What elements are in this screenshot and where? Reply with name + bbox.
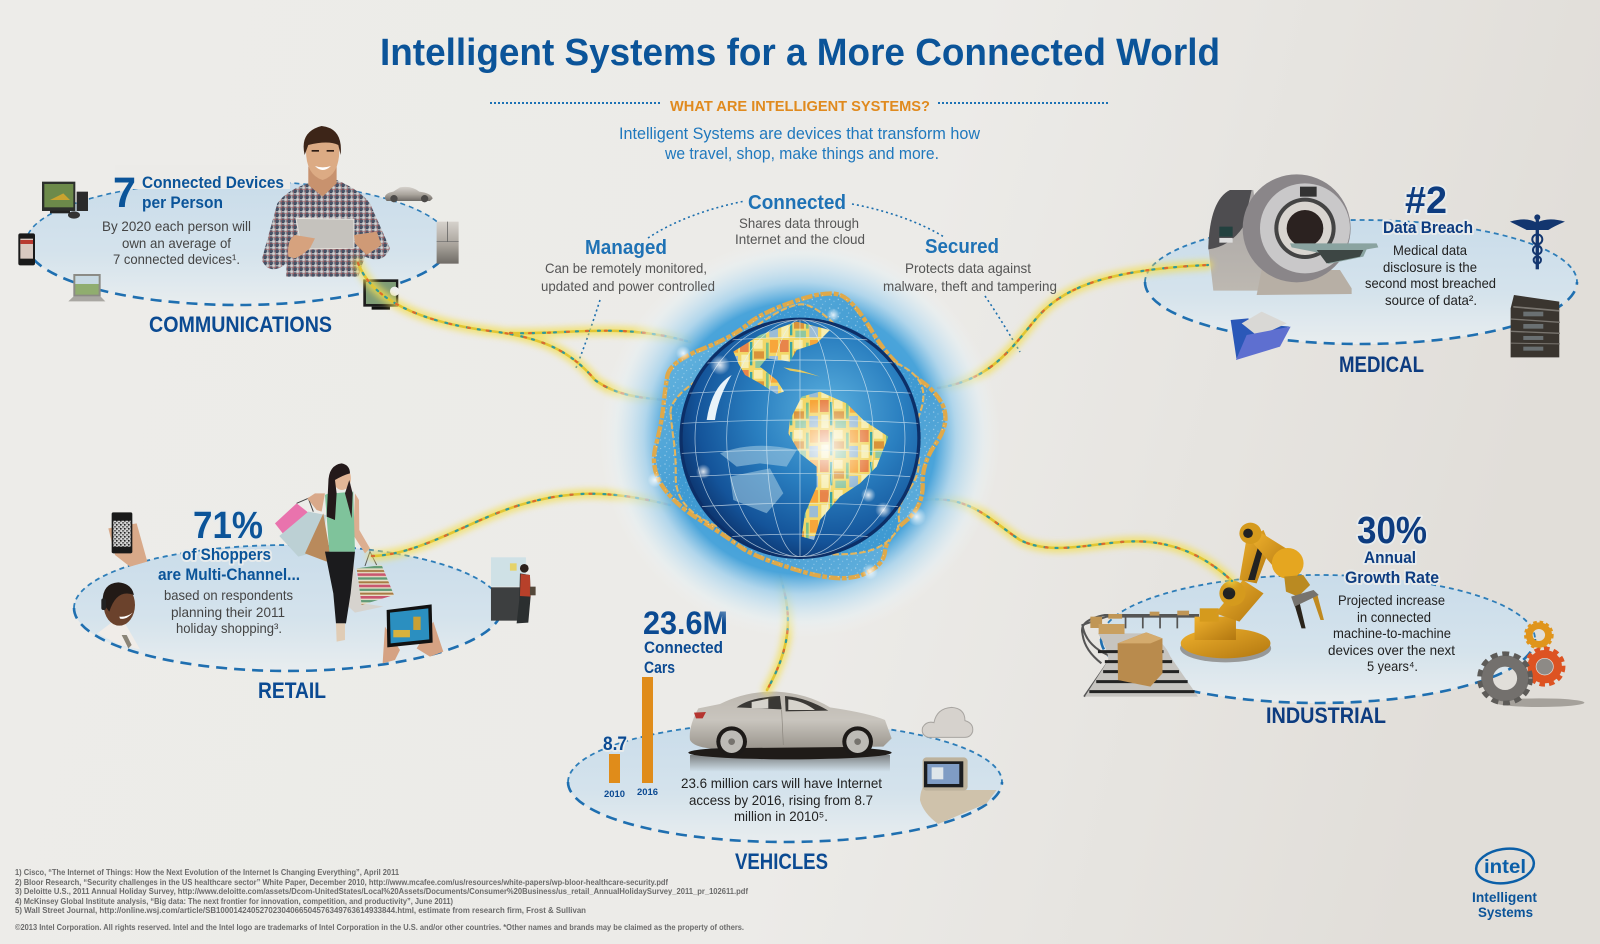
description bbox=[1328, 592, 1455, 674]
icon: man with tablet bbox=[262, 126, 390, 277]
description: planning their 2011 bbox=[171, 604, 285, 620]
north america bbox=[733, 322, 830, 394]
description: 7 connected devices¹. bbox=[113, 251, 240, 267]
globe bbox=[600, 238, 1000, 638]
description: in connected bbox=[1357, 609, 1431, 625]
sphere bbox=[648, 308, 926, 580]
orbiting ribbons bbox=[641, 280, 957, 592]
footnotes: 4) McKinsey Global Institute analysis, “Big data: The next frontier for innovation, competition, and productivity”, June 2011) bbox=[15, 896, 453, 906]
footnotes: 2) Bloor Research, “Security challenges in the US healthcare sector” White Paper, December 2010, http://www.mcafee.com/us/resources/white-papers/wp-bloor-healthcare-security.pdf bbox=[15, 877, 668, 887]
attribute: managed: updated and power controlled bbox=[541, 278, 715, 294]
stat bbox=[643, 605, 728, 677]
attribute: connected: Internet and the cloud bbox=[735, 231, 865, 247]
panel: industrial bbox=[1082, 510, 1584, 728]
icon: phone in hand bbox=[108, 512, 147, 567]
stat: Growth Rate bbox=[1345, 568, 1439, 587]
icon: conveyor belt with boxes bbox=[1082, 611, 1198, 697]
grid lines bbox=[682, 320, 918, 557]
description bbox=[164, 587, 293, 636]
description: source of data². bbox=[1385, 292, 1477, 308]
logo: intel intelligent systems: Intelligent bbox=[1472, 889, 1537, 905]
bar chart bbox=[603, 677, 658, 799]
icon: blue folder bbox=[1231, 312, 1291, 360]
description: access by 2016, rising from 8.7 bbox=[689, 792, 873, 808]
bar chart: 8.7 bbox=[603, 734, 627, 755]
description: Medical data bbox=[1393, 242, 1467, 258]
south america bbox=[788, 392, 888, 540]
attribute: connected: Connected bbox=[748, 192, 846, 214]
orbit ellipse bbox=[1101, 575, 1535, 703]
description: devices over the next bbox=[1328, 642, 1455, 658]
bar chart: 2016 bbox=[637, 787, 658, 797]
intro text: Intelligent Systems are devices that transform how bbox=[619, 124, 981, 143]
description: million in 2010⁵. bbox=[734, 808, 828, 824]
logo: intel intelligent systems: intel bbox=[1484, 857, 1526, 878]
logo: intel intelligent systems bbox=[1472, 845, 1537, 920]
attribute: secured: Secured bbox=[925, 236, 999, 258]
stat: 71% bbox=[193, 505, 263, 547]
stat: Cars bbox=[644, 658, 675, 677]
icon: caduceus bbox=[1510, 214, 1565, 269]
description: 23.6 million cars will have Internet bbox=[681, 775, 882, 791]
description: based on respondents bbox=[164, 587, 293, 603]
icon: server rack bbox=[1511, 295, 1560, 357]
data streams connecting globe to sectors bbox=[358, 263, 1232, 690]
stat: Annual bbox=[1364, 548, 1416, 567]
icon: MRI scanner bbox=[1208, 174, 1378, 295]
description bbox=[102, 218, 251, 267]
orbit ellipse bbox=[26, 165, 450, 305]
panel: retail bbox=[74, 463, 536, 703]
footnotes: 3) Deloitte U.S., 2011 Annual Holiday Survey, http://www.deloitte.com/assets/Dcom-UnitedStates/Local%20Assets/Documents/Consumer%20Business/us_retail_AnnualHolidaySurvey_2011_pr_102611.pdf bbox=[15, 886, 748, 896]
orbit ellipse bbox=[568, 722, 1002, 842]
stat: #2 bbox=[1405, 180, 1447, 222]
heading: RETAIL bbox=[258, 678, 326, 703]
icon: robot arm bbox=[1180, 523, 1324, 662]
description: own an average of bbox=[122, 235, 231, 251]
stat: 23.6M bbox=[643, 605, 728, 641]
stat: 7 bbox=[113, 169, 136, 217]
panel: communications bbox=[18, 126, 459, 337]
panel: vehicles bbox=[568, 605, 1002, 874]
icon: tablet in hands bbox=[383, 604, 443, 663]
stat: per Person bbox=[142, 193, 223, 212]
attribute: managed: Managed bbox=[585, 237, 667, 259]
description: Projected increase bbox=[1338, 592, 1445, 608]
title: Intelligent Systems for a More Connected World bbox=[380, 32, 1220, 74]
attribute: secured: malware, theft and tampering bbox=[883, 278, 1057, 294]
faded continents bbox=[720, 446, 797, 513]
description: machine-to-machine bbox=[1333, 625, 1451, 641]
icon: gears bbox=[1480, 622, 1584, 707]
icon: car bbox=[688, 692, 892, 772]
footnotes: ©2013 Intel Corporation. All rights reserved. Intel and the Intel logo are trademarks of Intel Corporation in the U.S. and/or other countries. *Other names and brands may be claimed as the property of others. bbox=[15, 922, 744, 932]
intro text bbox=[619, 124, 981, 163]
stat bbox=[1383, 180, 1473, 237]
stat: Connected Devices bbox=[142, 173, 284, 192]
attribute: connected bbox=[735, 192, 865, 247]
panel: medical bbox=[1145, 174, 1577, 377]
attribute: managed: Can be remotely monitored, bbox=[545, 260, 707, 276]
icons: devices bbox=[18, 182, 459, 301]
stat bbox=[158, 505, 300, 584]
footnotes: 5) Wall Street Journal, http://online.wsj.com/article/SB10001424052702304066504576349763614933844.html, estimate from research firm, Frost & Sullivan bbox=[15, 905, 586, 915]
intro text: we travel, shop, make things and more. bbox=[664, 144, 939, 163]
orbit ellipse bbox=[1145, 220, 1577, 344]
icon: seat-back screen bbox=[920, 757, 997, 824]
stat: are Multi-Channel... bbox=[158, 565, 300, 584]
attribute: connected: Shares data through bbox=[739, 215, 859, 231]
globe halo bbox=[600, 238, 1000, 638]
stat: Connected bbox=[644, 638, 723, 657]
stat: of Shoppers bbox=[182, 545, 271, 564]
bar chart: 2010 bbox=[604, 789, 625, 799]
heading: MEDICAL bbox=[1339, 352, 1424, 377]
logo: intel intelligent systems: Systems bbox=[1478, 904, 1533, 920]
description bbox=[1365, 242, 1496, 308]
icon: woman with shopping bags bbox=[275, 463, 394, 642]
icon: cloud bbox=[922, 707, 973, 737]
heading: what are intelligent systems: WHAT ARE INTELLIGENT SYSTEMS? bbox=[670, 98, 930, 115]
heading: COMMUNICATIONS bbox=[149, 312, 332, 337]
stat bbox=[113, 169, 284, 217]
heading: VEHICLES bbox=[735, 849, 828, 874]
icon: television bbox=[363, 279, 399, 310]
orbit ellipse bbox=[74, 545, 502, 671]
attribute: secured bbox=[883, 236, 1057, 294]
stat: Data Breach bbox=[1383, 218, 1473, 237]
stat bbox=[1345, 510, 1439, 587]
description: 5 years⁴. bbox=[1367, 658, 1418, 674]
footnotes bbox=[15, 867, 748, 932]
heading: INDUSTRIAL bbox=[1266, 703, 1386, 728]
highlights bbox=[707, 375, 732, 420]
description: second most breached bbox=[1365, 275, 1496, 291]
description: By 2020 each person will bbox=[102, 218, 251, 234]
footnotes: 1) Cisco, “The Internet of Things: How the Next Evolution of the Internet Is Changing Everything”, April 2011 bbox=[15, 867, 399, 877]
attribute: managed bbox=[541, 237, 715, 294]
attribute: secured: Protects data against bbox=[905, 260, 1031, 276]
icon: headset agent bbox=[97, 582, 140, 649]
dotted arcs linking attributes bbox=[576, 201, 1020, 368]
description: holiday shopping³. bbox=[176, 620, 282, 636]
description: disclosure is the bbox=[1383, 259, 1477, 275]
icon: kiosk and visitor bbox=[491, 557, 536, 623]
description bbox=[681, 775, 882, 824]
stat: 30% bbox=[1357, 510, 1427, 552]
